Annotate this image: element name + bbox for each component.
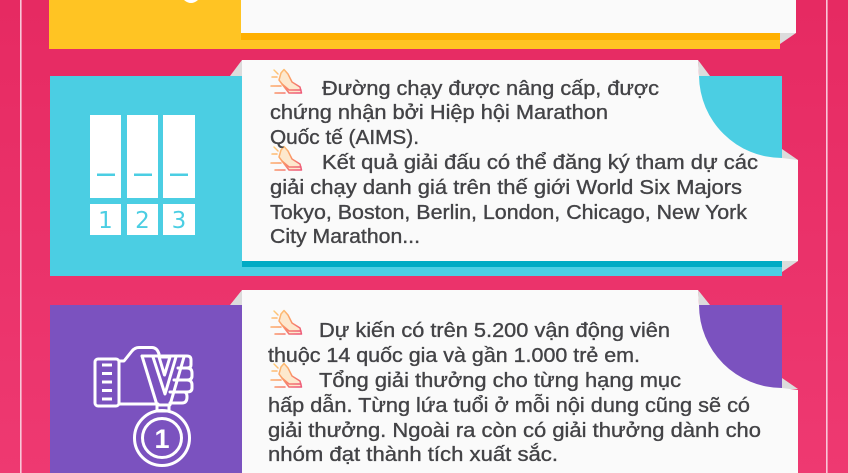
text block: course: Đường chạy được nâng cấp, được [322,78,659,100]
panel: participants and prizes [50,290,798,473]
text block: course: Kết quả giải đấu có thể đăng ký tham dự các [322,152,758,174]
text block: course: giải chạy danh giá trên thế giới World Six Majors [270,177,742,199]
icon: numbered lanes [90,115,195,235]
text block: participants: thuộc 14 quốc gia và gần 1.000 trẻ em. [268,345,640,367]
text block: participants: hấp dẫn. Từng lứa tuổi ở mỗi nội dung cũng sẽ có [268,394,750,417]
icon: shoe [271,70,302,93]
purple panel background [50,305,782,473]
text block: participants [268,320,761,466]
text block: course: chứng nhận bởi Hiệp hội Marathon [270,102,608,124]
text block: participants: giải thưởng. Ngoài ra còn có giải thưởng dành cho [268,420,761,442]
icon: shoe [271,364,302,387]
text block: course [270,78,758,248]
icon: numbered lanes: 2 [135,208,150,234]
panel: course certification [50,60,798,276]
icon: numbered lanes: 1 [98,208,113,234]
white text card [242,60,798,261]
text block: course: Tokyo, Boston, Berlin, London, Chicago, New York [270,202,748,224]
icon: medal in fist [95,348,192,466]
icon: shoe [271,146,302,170]
text block: participants: Tổng giải thưởng cho từng hạng mục [319,370,681,392]
icon: shoe [271,310,302,334]
white text card [242,290,798,473]
panel: yellow [49,0,796,49]
text block: participants: Dự kiến có trên 5.200 vận động viên [319,320,670,342]
text block: course: City Marathon... [270,226,420,248]
cyan panel background [50,76,782,276]
medal number: 1 [154,424,170,454]
icon: numbered lanes: 3 [172,208,186,234]
text block: course: Quốc tế (AIMS). [270,127,419,149]
text block: participants: nhóm đạt thành tích xuất sắc. [268,443,558,466]
